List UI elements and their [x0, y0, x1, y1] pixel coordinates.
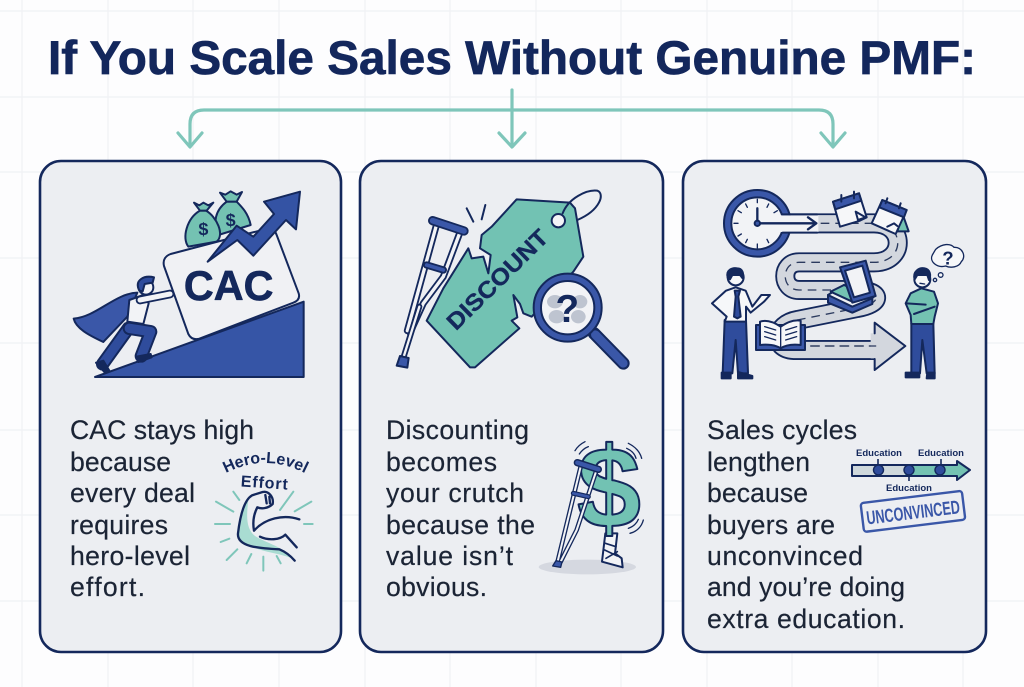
- cape: [74, 293, 137, 342]
- panel: CAC: [38, 160, 342, 654]
- illustration: hero pushing CAC block uphill: $: [198, 219, 208, 239]
- confused person: ?: [942, 247, 954, 268]
- body text: buyers are: [707, 510, 835, 540]
- icon: crutch: [403, 221, 464, 360]
- body text: Sales cycles: [707, 415, 857, 445]
- icon: dollar on a crutch: [539, 424, 643, 574]
- icon: education timeline with unconvinced stamp: UNCONVINCED: [865, 497, 961, 530]
- body text: effort.: [70, 572, 145, 602]
- icon: hero-level effort bicep: Effort: [240, 473, 289, 494]
- icon: money bags: [185, 191, 251, 247]
- slope: [95, 302, 304, 377]
- panel: sales cycle: [683, 161, 986, 652]
- illustration: broken discount tag: DISCOUNT: [441, 224, 553, 335]
- body text: every deal: [70, 478, 195, 508]
- icon: rising arrow: [208, 192, 300, 262]
- icon: hero-level effort bicep: Hero-Level: [222, 452, 310, 473]
- CAC block: CAC: [184, 263, 273, 309]
- icon: calendars: [833, 192, 909, 234]
- icon: education timeline with unconvinced stamp: Education: [918, 448, 964, 459]
- discount tag: [427, 199, 583, 367]
- torso: [127, 295, 149, 324]
- body text: because the: [386, 510, 535, 540]
- icon: dollar on a crutch: $: [577, 424, 641, 552]
- body text: [386, 415, 535, 602]
- body text: [707, 415, 905, 634]
- head: [139, 280, 153, 295]
- body text: requires: [70, 510, 168, 540]
- body text: Discounting: [386, 415, 529, 445]
- body text: lengthen: [707, 447, 810, 477]
- connector arrows: [178, 90, 845, 147]
- body text: because: [70, 447, 171, 477]
- rear leg: [103, 328, 128, 364]
- arms: [140, 294, 170, 300]
- body text: obvious.: [386, 572, 487, 602]
- body text: hero-level: [70, 541, 190, 571]
- illustration: broken discount tag: [397, 191, 623, 368]
- icon: hero-level effort bicep: [214, 452, 314, 572]
- icon: open book: [756, 320, 805, 350]
- panel: discount: [360, 161, 663, 652]
- icon: tablet on books: [828, 261, 876, 313]
- body text: value isn’t: [386, 541, 514, 571]
- icon: education timeline with unconvinced stamp: [852, 448, 970, 532]
- icon: magnifying glass: [534, 274, 623, 363]
- illustration: hero pushing CAC block uphill: $: [226, 210, 236, 230]
- body text: [70, 415, 254, 602]
- icon: education timeline with unconvinced stamp: Education: [886, 483, 932, 494]
- spark lines: [467, 205, 485, 222]
- front leg: [129, 328, 151, 356]
- body text: unconvinced: [707, 541, 863, 571]
- body text: extra education.: [707, 604, 905, 634]
- icon: clock: [724, 190, 818, 257]
- arrow head: [811, 323, 905, 370]
- title: If You Scale Sales Without Genuine PMF:: [48, 31, 976, 84]
- illustration: hero pushing CAC block uphill: [74, 191, 304, 377]
- illustration: long winding road: [712, 190, 964, 378]
- body text: becomes: [386, 447, 497, 477]
- CAC block: [164, 228, 299, 339]
- body text: because: [707, 478, 808, 508]
- road: [778, 223, 898, 350]
- icon: education timeline with unconvinced stamp: Education: [856, 448, 902, 459]
- body text: your crutch: [386, 478, 524, 508]
- icon: magnifying glass: ?: [556, 288, 579, 331]
- tag hole and string: [552, 214, 565, 227]
- presenter: [712, 268, 770, 378]
- hero figure: [74, 277, 170, 373]
- body text: CAC stays high: [70, 415, 254, 445]
- body text: and you’re doing: [707, 572, 905, 602]
- confused person: [906, 245, 964, 378]
